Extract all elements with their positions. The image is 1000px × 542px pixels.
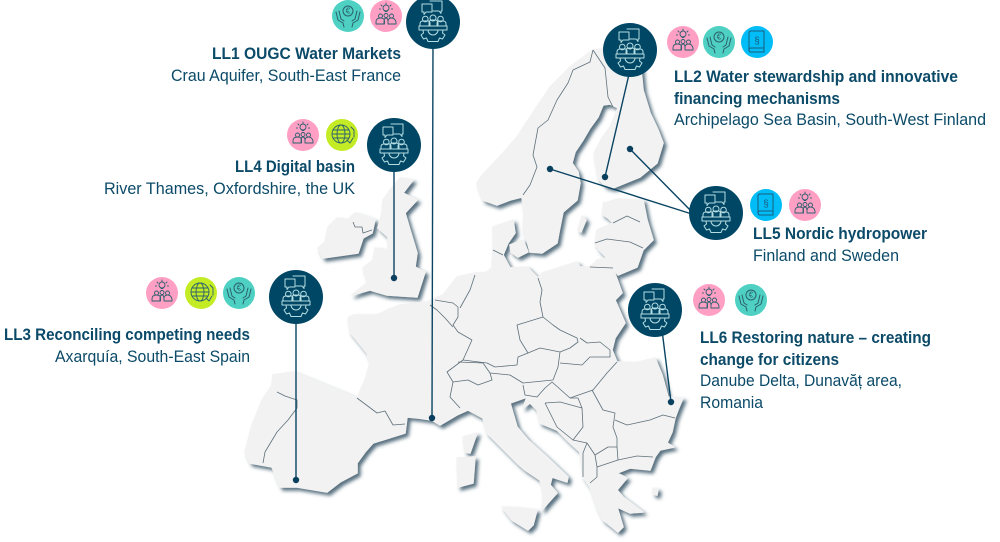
Denmark: Zealand (510, 240, 528, 257)
Borders (263, 50, 675, 483)
icon: LL3 hub (269, 270, 323, 324)
connector lines and pins (293, 40, 695, 483)
LL6 title line 2: change for citizens (700, 350, 839, 369)
icon: citizens (146, 277, 178, 309)
icon: globe (185, 277, 217, 309)
panel: LL6 (628, 283, 931, 412)
LL6 location line 2: Romania (700, 393, 763, 412)
map of Europe (245, 48, 683, 532)
Islands (653, 488, 658, 495)
icon: LL5 hub (689, 186, 743, 240)
LL1 title: LL1 OUGC Water Markets (212, 44, 401, 63)
panel: LL3 (4, 270, 323, 366)
Denmark: Jutland (493, 220, 515, 255)
LL1 location: Crau Aquifer, South-East France (171, 66, 401, 85)
United Kingdom (352, 178, 425, 297)
icon: LL6 hub (628, 283, 682, 337)
LL5 title: LL5 Nordic hydropower (753, 224, 927, 243)
LL6 title: LL6 Restoring nature – creating (700, 328, 931, 347)
icon: financing (332, 0, 364, 32)
icon: LL2 hub (603, 23, 657, 77)
icon: financing (223, 277, 255, 309)
icon: law book (741, 26, 773, 58)
Sardinia (457, 457, 475, 487)
LL3 title: LL3 Reconciling competing needs (4, 325, 250, 344)
icon: law book (750, 189, 782, 221)
LL2 location: Archipelago Sea Basin, South-West Finland (674, 110, 986, 129)
Ireland (318, 213, 375, 258)
LL2 title: LL2 Water stewardship and innovative (674, 67, 958, 86)
icon: LL4 hub (367, 118, 421, 172)
LL2 title line 2: financing mechanisms (674, 89, 840, 108)
Mainland Europe (245, 199, 683, 532)
icon: globe (326, 119, 358, 151)
icon: citizens (693, 284, 725, 316)
LL4 title: LL4 Digital basin (235, 157, 355, 176)
icon: citizens (287, 119, 319, 151)
LL4 location: River Thames, Oxfordshire, the UK (104, 179, 356, 198)
LL3 location: Axarquía, South-East Spain (55, 347, 250, 366)
icon: financing (735, 284, 767, 316)
LL5 location: Finland and Sweden (753, 246, 899, 265)
Sicily (502, 507, 537, 530)
icon: LL1 hub (406, 0, 460, 49)
Scandinavia (477, 48, 663, 253)
panel: LL1 (171, 0, 460, 85)
panel: LL4 (104, 118, 421, 198)
Corsica (463, 433, 477, 453)
panel: LL2 (603, 23, 986, 129)
panel: LL5 (689, 186, 927, 265)
icon: financing (703, 26, 735, 58)
icon: citizens (667, 26, 699, 58)
icon: citizens (789, 189, 821, 221)
icon: citizens (370, 0, 402, 32)
LL6 location: Danube Delta, Dunavăț area, (700, 371, 902, 390)
